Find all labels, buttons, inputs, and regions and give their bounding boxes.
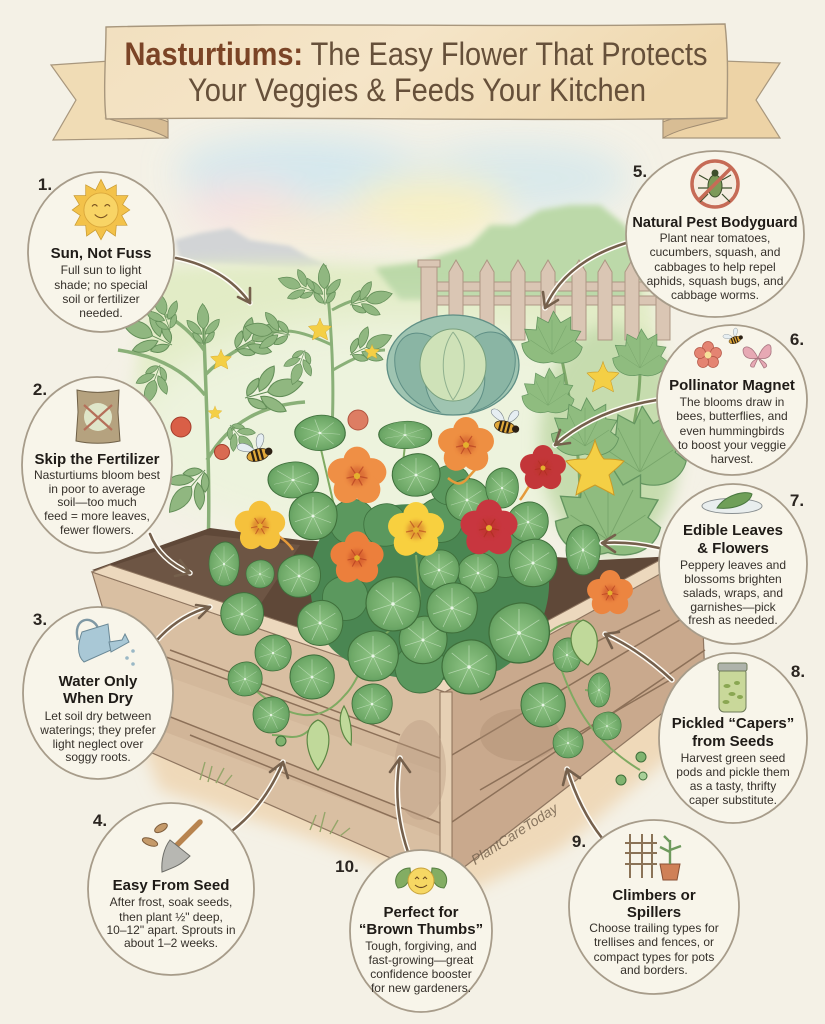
heading [359, 904, 483, 938]
heading: Water Only [59, 673, 138, 690]
body text [34, 468, 161, 537]
body text: soil or fertilizer [62, 292, 140, 306]
number 8: 8. [791, 662, 805, 681]
back foliage [323, 465, 528, 693]
body text: waterings; they prefer [39, 723, 156, 737]
tomato plant left [113, 286, 309, 562]
banner right ribbon tail [663, 61, 780, 138]
arrow 10 [390, 758, 410, 852]
body text: caper substitute. [689, 793, 777, 807]
number 7: 7. [790, 491, 804, 510]
heading [683, 522, 783, 557]
body text: aphids, squash bugs, and [647, 274, 783, 288]
icon: no bugs sign [692, 161, 738, 207]
body text: about 1–2 weeks. [124, 936, 218, 950]
heading [612, 887, 696, 921]
body text [54, 263, 148, 320]
title text: Your Veggies & Feeds Your Kitchen [188, 72, 646, 108]
heading [672, 715, 794, 750]
nasturtium stems and vines [255, 445, 640, 770]
body text: Peppery leaves and [680, 558, 786, 572]
watermark: PlantCareToday [468, 799, 561, 868]
icon: crossed-out fertilizer bag [76, 390, 120, 443]
number 10: 10. [335, 857, 359, 876]
body text: fresh as needed. [688, 613, 778, 627]
body text: harvest. [711, 452, 753, 466]
body text: to boost your veggie [678, 438, 786, 452]
body text: confidence booster [370, 967, 472, 981]
icon: flower, bee and butterfly [694, 327, 771, 368]
panel 7: edible leaves and flowers [659, 484, 807, 644]
heading: from Seeds [692, 733, 774, 750]
body text: even hummingbirds [680, 424, 784, 438]
banner folds [106, 115, 727, 138]
banner left ribbon tail [51, 61, 168, 140]
body text: Tough, forgiving, and [365, 939, 477, 953]
body text: then plant ½" deep, [119, 910, 223, 924]
body text: light neglect over [53, 737, 143, 751]
heading: Climbers or [612, 887, 696, 904]
tomato plant centre [242, 263, 399, 430]
arrow 5 [543, 243, 626, 308]
heading: Pickled “Capers” [672, 715, 794, 732]
arrow 6 [555, 400, 657, 445]
body text: shade; no special [54, 278, 148, 292]
body text [676, 395, 788, 466]
body text: Full sun to light [61, 263, 142, 277]
arrow 3 [158, 605, 210, 639]
body text: soggy roots. [65, 750, 131, 764]
icon: leaf on plate [702, 493, 762, 514]
body text [365, 939, 477, 995]
body text [39, 709, 156, 764]
body text [589, 921, 719, 977]
heading: When Dry [63, 690, 134, 707]
panel 3: water only when dry [23, 607, 173, 779]
heading: Easy From Seed [113, 877, 229, 894]
sky wash [175, 136, 630, 244]
icon: smiling sun [72, 179, 130, 240]
body text: bees, butterflies, and [676, 409, 788, 423]
ground wash under bed [120, 680, 700, 895]
body text: salads, wraps, and [683, 586, 783, 600]
heading: & Flowers [697, 540, 769, 557]
number 6: 6. [790, 330, 804, 349]
body text: cabbage worms. [671, 288, 759, 302]
icon: trowel and seeds [141, 821, 200, 872]
icon: watering can [77, 620, 135, 666]
body text: garnishes—pick [690, 600, 777, 614]
seed pods [307, 620, 597, 770]
nasturtium flowers [233, 417, 635, 618]
number 5: 5. [633, 162, 647, 181]
heading: Spillers [627, 904, 681, 921]
heading: “Brown Thumbs” [359, 921, 483, 938]
body text: trellises and fences, or [594, 935, 714, 949]
raised wooden bed [92, 528, 705, 882]
title text [124, 36, 708, 108]
body text: cabbages to help repel [654, 260, 776, 274]
icon: pickle jar [718, 663, 747, 712]
body text: blossoms brighten [684, 572, 782, 586]
body text [647, 231, 783, 302]
arrow 7 [602, 535, 659, 552]
heading: Edible Leaves [683, 522, 783, 539]
distant hills [130, 205, 670, 430]
body text: fast-growing—great [369, 953, 474, 967]
heading: Pollinator Magnet [669, 377, 795, 394]
body text: needed. [79, 306, 123, 320]
body text: Plant near tomatoes, [660, 231, 770, 245]
body text: Let soil dry between [45, 709, 151, 723]
heading [59, 673, 138, 707]
panel 9: climbers or spillers [569, 820, 739, 994]
body text: in poor to average [49, 482, 146, 496]
arrow 4 [233, 762, 288, 830]
body text: compact types for pots [594, 950, 714, 964]
number 3: 3. [33, 610, 47, 629]
heading: Natural Pest Bodyguard [632, 215, 798, 231]
panel 1: sun, not fuss [28, 172, 174, 332]
body text: Harvest green seed [681, 751, 785, 765]
icon: smiling sprout [396, 868, 447, 894]
body text: fewer flowers. [60, 523, 134, 537]
icon: bees [235, 404, 524, 465]
picket fence [418, 260, 670, 340]
body text [106, 895, 236, 950]
body text: Choose trailing types for [589, 921, 719, 935]
body text: feed = more leaves, [44, 509, 150, 523]
panel 8: pickled capers [659, 653, 807, 823]
garden glow behind plants [130, 315, 680, 555]
title text: Nasturtiums: The Easy Flower That Protects [124, 36, 708, 72]
heading: Skip the Fertilizer [34, 451, 160, 468]
title banner [51, 24, 780, 140]
number 1: 1. [38, 175, 52, 194]
heading: Sun, Not Fuss [51, 245, 151, 262]
body text [680, 558, 786, 627]
arrow 1 [176, 258, 250, 303]
body text: Nasturtiums bloom best [34, 468, 161, 482]
banner body [105, 24, 727, 119]
squash plant [522, 311, 686, 555]
heading: Perfect for [383, 904, 459, 921]
arrow 2 [150, 534, 190, 576]
body text: cucumbers, squash, and [650, 245, 780, 259]
body text: 10–12" apart. Sprouts in [106, 923, 236, 937]
body text [676, 751, 790, 807]
grass tufts [200, 762, 350, 836]
body text: and borders. [620, 963, 688, 977]
body text: After frost, soak seeds, [110, 895, 232, 909]
arrow 9 [563, 769, 602, 838]
nasturtium mound backing [310, 504, 549, 680]
body text: as a tasty, thrifty [690, 779, 776, 793]
panel 4: easy from seed [88, 803, 254, 975]
icon: trellis and potted plant [625, 834, 681, 880]
number 4: 4. [93, 811, 107, 830]
panel 10: perfect for brown thumbs [350, 850, 492, 1012]
body text: for new gardeners. [371, 981, 471, 995]
panel 6: pollinator magnet [657, 325, 807, 475]
panel 5: natural pest bodyguard [626, 151, 804, 317]
body text: The blooms draw in [680, 395, 784, 409]
arrow 8 [605, 632, 672, 680]
cabbage [387, 315, 519, 415]
body text: soil—too much [57, 495, 137, 509]
number 2: 2. [33, 380, 47, 399]
nasturtium leaves [209, 411, 647, 785]
body text: pods and pickle them [676, 765, 790, 779]
panel 2: skip the fertilizer [22, 377, 172, 553]
number 9: 9. [572, 832, 586, 851]
